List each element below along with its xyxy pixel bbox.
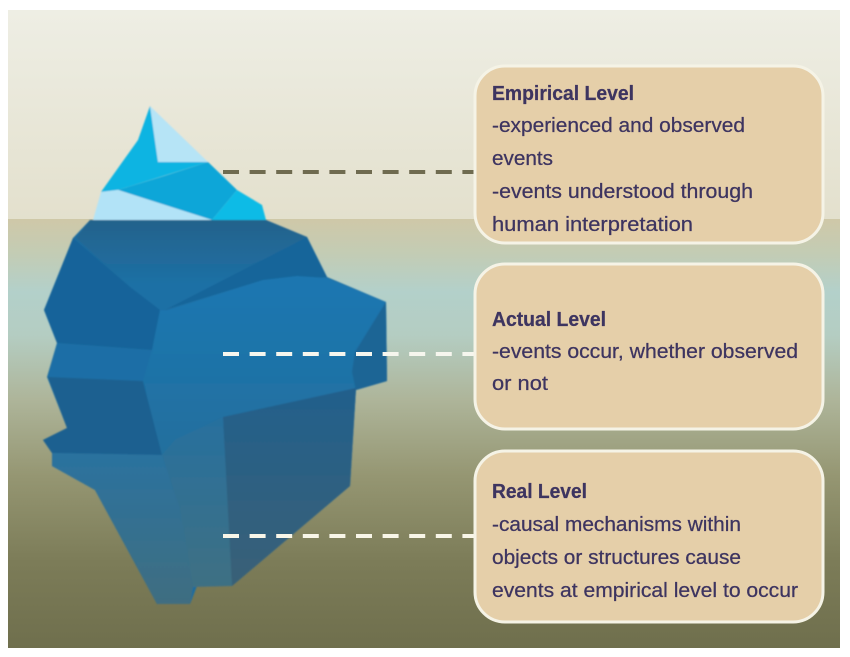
text: empirical description: -events understood through bbox=[492, 181, 753, 203]
panel: actual level bbox=[475, 264, 823, 429]
text: actual description: or not bbox=[492, 373, 548, 395]
iceberg bbox=[43, 106, 387, 604]
text: empirical description: human interpretation bbox=[492, 214, 693, 236]
text: real description: events at empirical level to occur bbox=[492, 580, 798, 602]
text: real description bbox=[492, 514, 798, 602]
text: actual description: -events occur, whether observed bbox=[492, 341, 798, 363]
text: real description: objects or structures cause bbox=[492, 547, 741, 569]
text: real description: -causal mechanisms within bbox=[492, 514, 741, 536]
dashed connector: real level bbox=[223, 534, 476, 538]
heading: actual level: Actual Level bbox=[492, 309, 606, 331]
text: empirical description bbox=[492, 115, 753, 236]
panel: real level bbox=[475, 451, 823, 622]
iceberg body below water bbox=[43, 220, 387, 604]
panel: empirical level bbox=[475, 66, 823, 243]
text: actual description bbox=[492, 341, 798, 395]
text: empirical description: -experienced and observed bbox=[492, 115, 745, 137]
dashed connector: empirical level bbox=[223, 170, 476, 174]
text: empirical description: events bbox=[492, 148, 553, 170]
heading: empirical level: Empirical Level bbox=[492, 83, 634, 105]
heading: real level: Real Level bbox=[492, 481, 587, 503]
iceberg tip above water bbox=[93, 106, 266, 220]
dashed connector: actual level bbox=[223, 352, 476, 356]
